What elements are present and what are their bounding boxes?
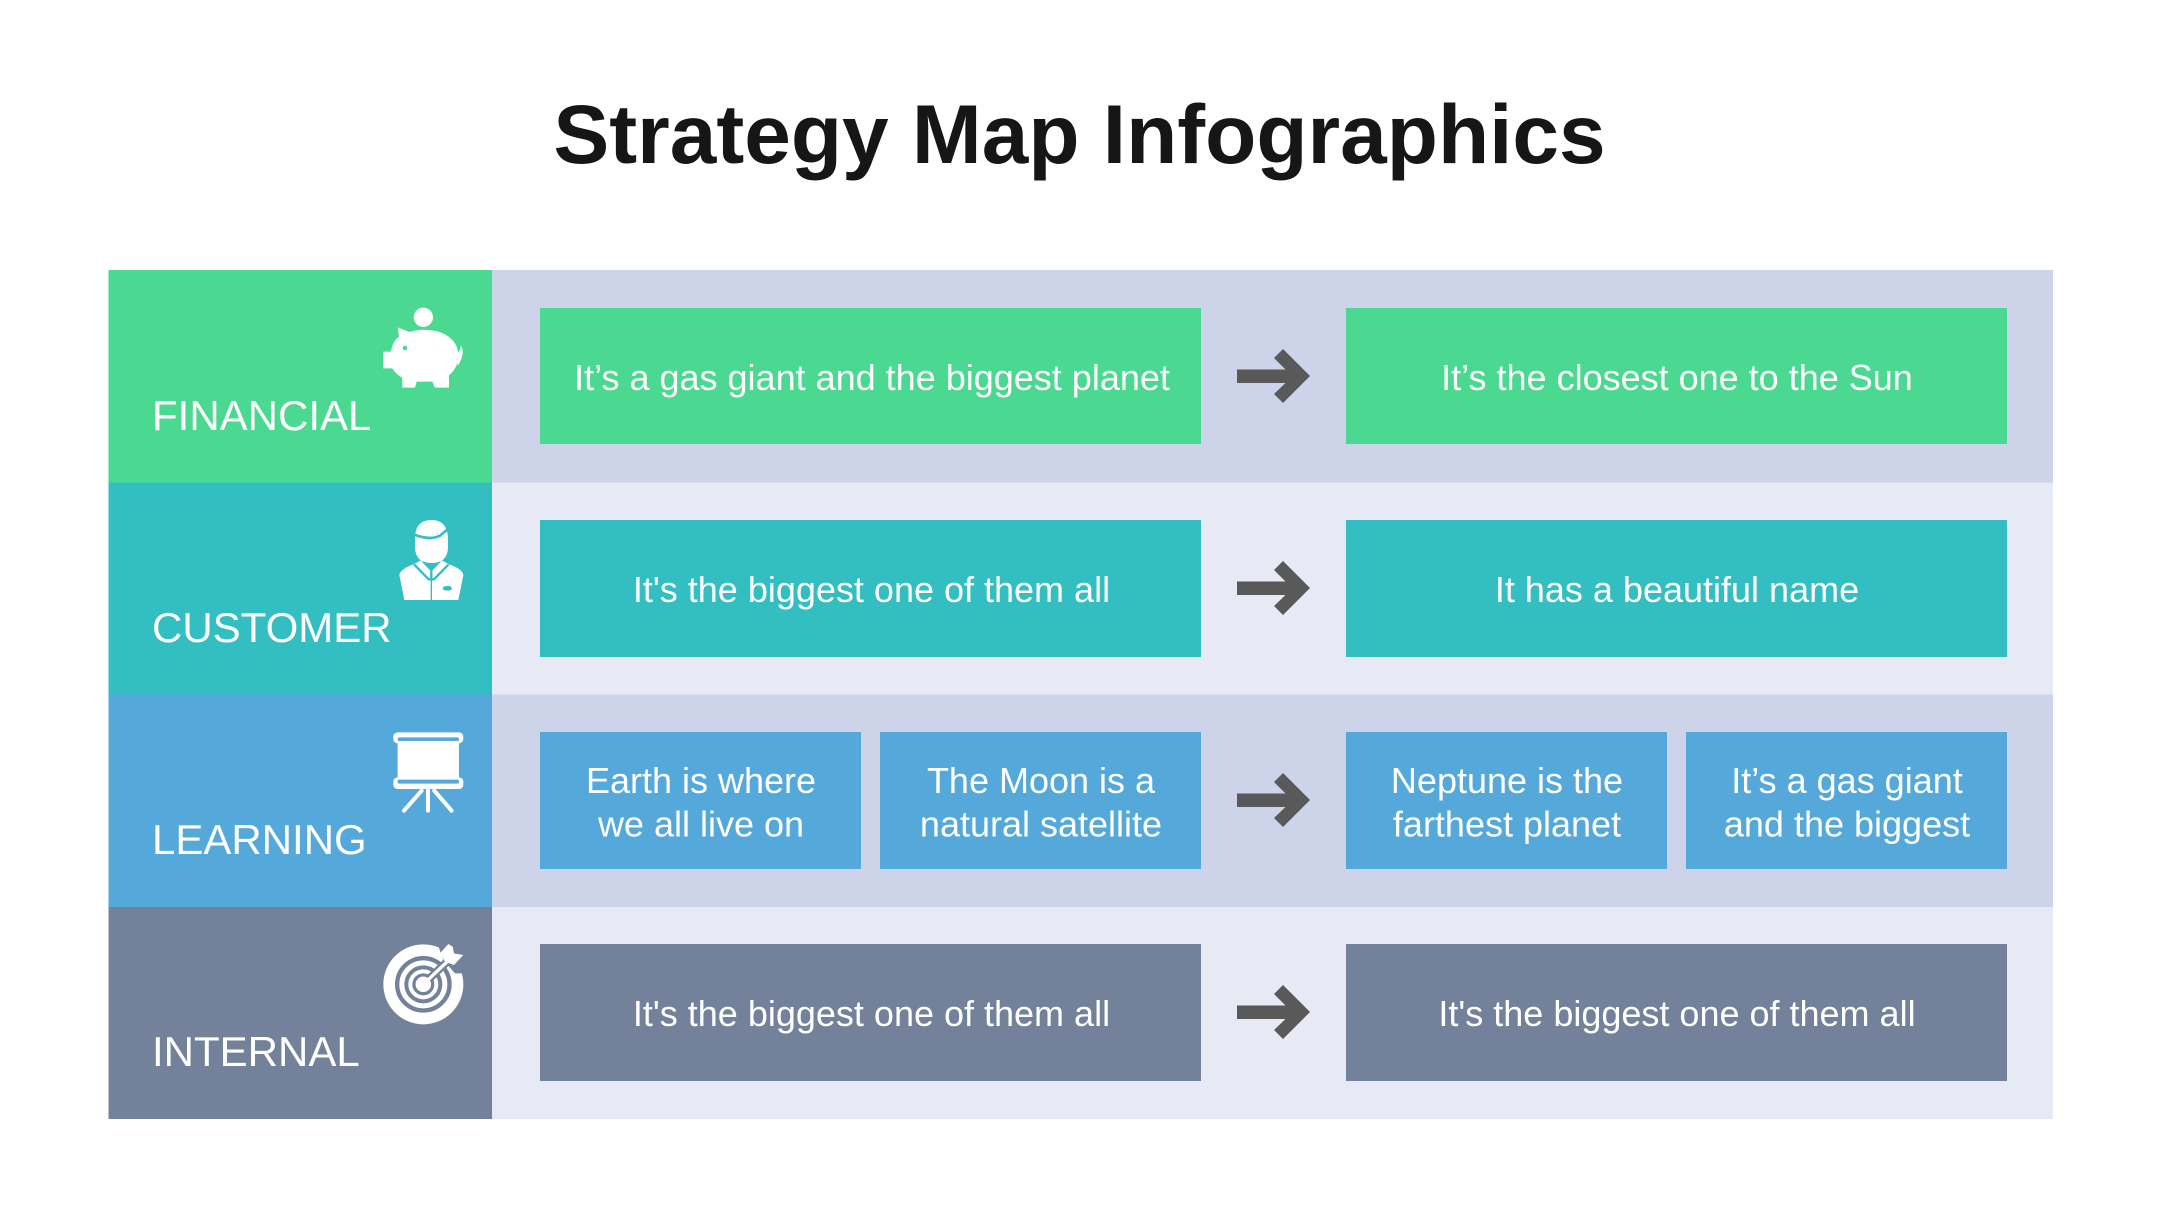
panel: financial row <box>108 270 2053 482</box>
arrow <box>1237 985 1310 1039</box>
text box: largest <box>540 520 1201 657</box>
heading: customer <box>108 482 492 694</box>
text box: neptune <box>1346 732 1667 869</box>
text box: largest <box>540 944 1201 1081</box>
panel: learning row <box>108 694 2053 907</box>
icon: piggy bank <box>383 308 463 388</box>
heading: internal <box>108 907 492 1119</box>
text box: earth <box>540 732 861 869</box>
text box: gas giant: and the biggest <box>1724 804 1970 844</box>
panel: internal row <box>108 907 2053 1119</box>
text box: gas giant <box>1686 732 2007 869</box>
text box: jupiter: It’s a gas giant and the biggest planet <box>574 357 1170 398</box>
heading: financial: FINANCIAL <box>152 392 371 439</box>
arrow <box>1237 561 1310 615</box>
text box: neptune: farthest planet <box>1393 804 1621 844</box>
icon: person <box>399 520 463 600</box>
icon: target <box>383 943 468 1024</box>
text box: moon: The Moon is a <box>927 760 1156 801</box>
heading: financial <box>108 270 492 482</box>
arrow <box>1237 349 1310 403</box>
heading: learning: LEARNING <box>152 816 367 863</box>
text box: venus <box>1346 520 2007 657</box>
text box: largest: It's the biggest one of them all <box>633 993 1110 1034</box>
text box: largest: It's the biggest one of them all <box>633 569 1110 610</box>
text box: earth: we all live on <box>597 804 804 844</box>
text box: venus: It has a beautiful name <box>1495 569 1859 610</box>
arrow <box>1237 773 1310 827</box>
text box: neptune: Neptune is the <box>1391 760 1623 801</box>
panel: customer row <box>108 482 2053 694</box>
text box: moon <box>880 732 1201 869</box>
text box: largest: It's the biggest one of them all <box>1438 993 1916 1034</box>
text box: largest <box>1346 944 2007 1081</box>
heading: internal: INTERNAL <box>152 1028 360 1075</box>
text box: gas giant: It’s a gas giant <box>1731 760 1963 801</box>
text box: mercury: It’s the closest one to the Sun <box>1441 357 1913 398</box>
text box: moon: natural satellite <box>920 804 1162 844</box>
heading: customer: CUSTOMER <box>152 604 392 651</box>
text box: earth: Earth is where <box>586 760 816 801</box>
heading: learning <box>108 694 492 907</box>
icon: presentation board <box>393 732 463 811</box>
title: Strategy Map Infographics <box>553 87 1606 181</box>
text box: jupiter <box>540 308 1201 444</box>
text box: mercury <box>1346 308 2007 444</box>
